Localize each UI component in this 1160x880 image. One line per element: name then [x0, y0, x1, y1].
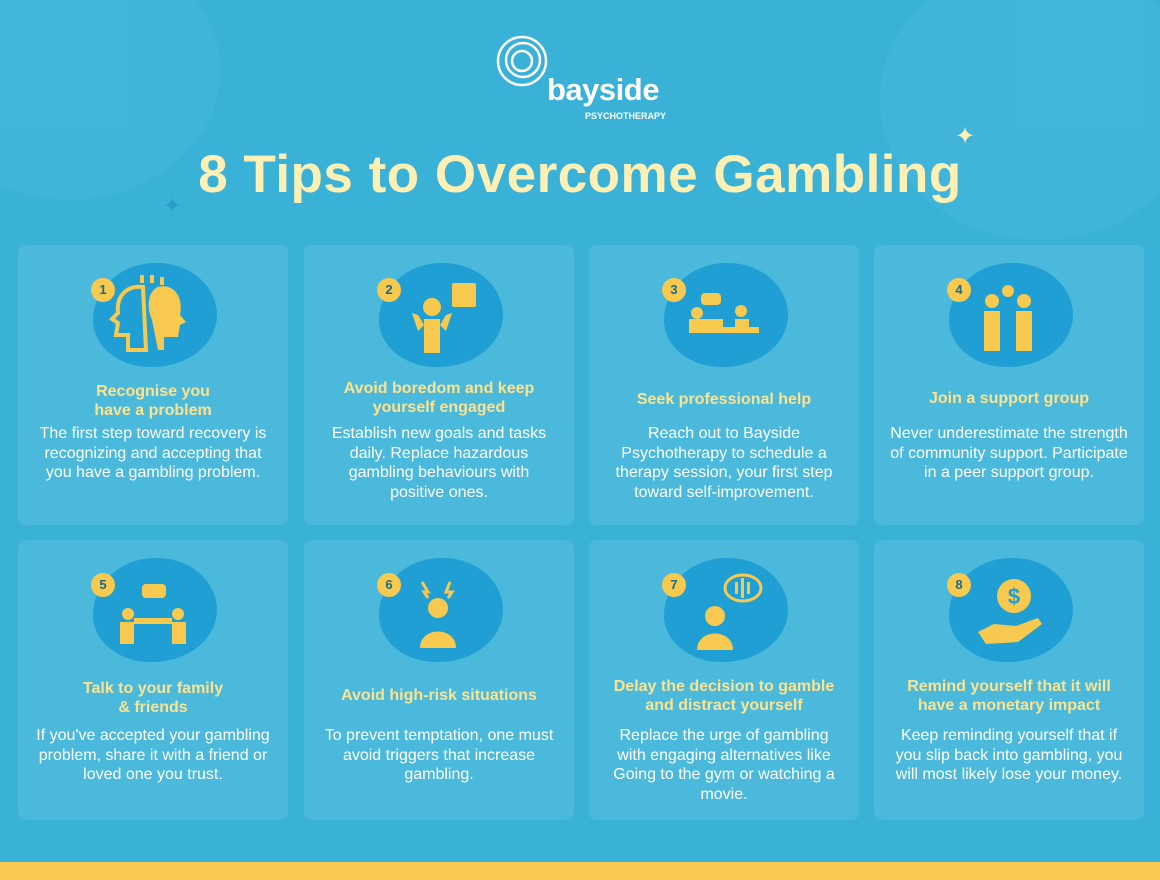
card 3: 3	[670, 282, 678, 297]
title: 8 Tips to Overcome Gambling	[198, 145, 962, 204]
card 1: 1	[99, 282, 107, 297]
card 1: The first step toward recovery is recognizing and accepting that you have a gambling problem.	[40, 425, 266, 481]
card 2: Avoid boredom and keep	[344, 380, 534, 397]
card 7: 7	[670, 577, 678, 592]
card 4: Join a support group	[929, 390, 1089, 407]
card 8: have a monetary impact	[918, 697, 1100, 714]
card 6: 6	[385, 577, 393, 592]
card 3: Seek professional help	[637, 391, 811, 408]
text: ✦	[163, 193, 181, 218]
icon: thinking person	[697, 574, 762, 650]
card 5: & friends	[118, 699, 188, 716]
card 2: Establish new goals and tasks daily. Replace hazardous gambling behaviours with positive ones.	[332, 425, 546, 500]
card 7: and distract yourself	[645, 697, 803, 714]
logo: bayside	[547, 72, 659, 107]
card 2: yourself engaged	[373, 399, 505, 416]
card 7: Delay the decision to gamble	[614, 678, 834, 695]
icon: therapy	[689, 293, 759, 333]
logo: PSYCHOTHERAPY	[585, 111, 666, 121]
card 4	[874, 245, 1144, 525]
card 5: Talk to your family	[83, 680, 223, 697]
card 7	[589, 540, 859, 820]
card 6: To prevent temptation, one must avoid triggers that increase gambling.	[325, 727, 553, 783]
card 1: Recognise you	[96, 383, 210, 400]
icon: heads	[108, 275, 186, 352]
sparkles: ✦	[955, 123, 975, 150]
card 6	[304, 540, 574, 820]
card 8	[874, 540, 1144, 820]
card 4: Never underestimate the strength of community support. Participate in a peer support group.	[890, 425, 1128, 481]
card 2	[304, 245, 574, 525]
card 5: If you've accepted your gambling problem, share it with a friend or loved one you trust.	[36, 727, 270, 783]
logo	[496, 36, 666, 121]
icon: support group	[984, 285, 1032, 351]
icon: stressed person	[420, 581, 456, 648]
card 5	[18, 540, 288, 820]
card 1: have a problem	[94, 402, 212, 419]
icon: engaged person	[412, 283, 476, 353]
card 8: Remind yourself that it will	[907, 678, 1111, 695]
icon: money hand: $	[1008, 584, 1020, 609]
icon: family talk	[120, 584, 186, 644]
card 3: Reach out to Bayside Psychotherapy to schedule a therapy session, your first step toward self-improvement.	[616, 425, 832, 500]
card 2: 2	[385, 282, 393, 297]
card 6: Avoid high-risk situations	[341, 687, 537, 704]
icon: money hand	[978, 579, 1042, 644]
card 7: Replace the urge of gambling with engaging alternatives like Going to the gym or watching a movie.	[613, 727, 835, 802]
card 8: Keep reminding yourself that if you slip back into gambling, you will most likely lose your money.	[896, 727, 1122, 783]
card 3	[589, 245, 859, 525]
card 5: 5	[99, 577, 107, 592]
card 4: 4	[955, 282, 963, 297]
card 8: 8	[955, 577, 963, 592]
footer bar	[0, 862, 1160, 880]
card 1	[18, 245, 288, 525]
